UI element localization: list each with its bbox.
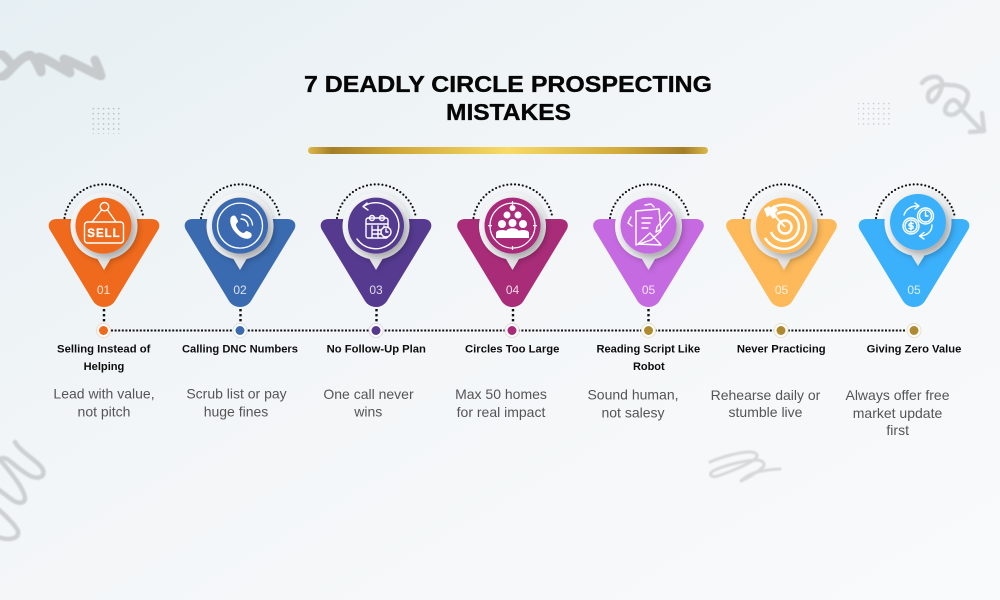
- icon: phone: [218, 203, 262, 248]
- description: [323, 386, 414, 420]
- icon disc: [212, 198, 268, 254]
- pointer shape: [321, 219, 431, 307]
- step number: 03: [369, 283, 383, 297]
- title: MISTAKES: [446, 99, 571, 125]
- description: One call never: [323, 386, 414, 402]
- card 6: Never Practicing: [711, 184, 837, 420]
- card 2: Calling DNC Numbers: [182, 184, 298, 420]
- connector stub: [512, 309, 514, 323]
- description: wins: [353, 404, 382, 420]
- dotted arc: [474, 184, 552, 218]
- description: Max 50 homes: [455, 386, 547, 402]
- description: [587, 386, 679, 420]
- heading: [57, 344, 151, 373]
- description: market update: [853, 405, 942, 421]
- card 1: Selling Instead of Helping: [49, 184, 159, 420]
- description: for real impact: [457, 404, 545, 420]
- dotted arc: [337, 184, 416, 218]
- dot grid: top right: [858, 101, 890, 127]
- heading: Selling Instead of: [57, 344, 151, 356]
- scribble: bottom left: [0, 442, 43, 539]
- dotted arc: [64, 184, 144, 218]
- icon disc: [484, 198, 540, 254]
- icon disc: [756, 198, 812, 254]
- step number: 05: [642, 283, 655, 297]
- description: not salesy: [601, 404, 665, 420]
- description: [186, 385, 287, 420]
- title: 7 DEADLY CIRCLE PROSPECTING: [304, 71, 712, 97]
- description: Sound human,: [587, 386, 679, 402]
- description: [53, 385, 155, 420]
- pin halo: [70, 193, 138, 270]
- pin halo: [206, 193, 274, 270]
- card 7: Giving Zero Value: [845, 184, 969, 438]
- icon: target and arrow: [764, 205, 806, 249]
- scribble: top right arrow: [922, 77, 984, 132]
- description: Always offer free: [845, 387, 950, 403]
- timeline node: [642, 324, 656, 338]
- heading: Calling DNC Numbers: [182, 344, 298, 356]
- icon: group of people in target: [488, 201, 537, 250]
- scribble: top left: [0, 53, 101, 78]
- pointer shape: [726, 219, 837, 307]
- description: Rehearse daily or: [711, 387, 821, 403]
- timeline node: [233, 324, 247, 338]
- description: Lead with value,: [53, 385, 155, 401]
- icon: money and time exchange: [903, 203, 934, 239]
- gold divider bar: [308, 147, 708, 154]
- description: stumble live: [729, 404, 803, 420]
- heading: No Follow-Up Plan: [327, 344, 426, 356]
- connector stub: [103, 309, 105, 323]
- title: [304, 71, 712, 125]
- icon: calendar and clock: [357, 203, 399, 249]
- heading: Robot: [633, 361, 665, 373]
- dotted arc: [201, 184, 280, 218]
- step number: 02: [233, 283, 247, 297]
- description: [711, 387, 821, 420]
- heading: Reading Script Like: [596, 344, 700, 356]
- timeline node: [774, 324, 788, 338]
- pin halo: [342, 193, 410, 270]
- pointer shape: [185, 219, 295, 307]
- timeline node: [369, 324, 383, 338]
- timeline node: [907, 324, 921, 338]
- icon: script and pen: [628, 204, 672, 245]
- heading: Giving Zero Value: [867, 344, 961, 356]
- scribble: bottom centre: [710, 452, 780, 481]
- card 3: No Follow-Up Plan: [321, 184, 431, 420]
- timeline connector: [111, 330, 906, 332]
- step number: 05: [775, 283, 788, 297]
- connector stub: [239, 309, 242, 323]
- description: first: [886, 422, 909, 438]
- dotted arc: [744, 184, 822, 218]
- card 5: Reading Script Like Robot: [587, 184, 704, 420]
- dot grid: top left: [89, 106, 121, 134]
- heading: Never Practicing: [737, 344, 826, 356]
- step number: 05: [907, 283, 921, 297]
- icon disc: [348, 198, 404, 254]
- description: huge fines: [204, 404, 268, 420]
- card 4: Circles Too Large: [455, 184, 568, 420]
- icon: sell sign: SELL: [87, 228, 121, 240]
- heading: Helping: [84, 361, 125, 373]
- icon disc: [890, 194, 946, 250]
- heading: Circles Too Large: [465, 344, 559, 356]
- pointer shape: [49, 219, 159, 307]
- description: [845, 387, 950, 438]
- pin halo: [615, 193, 682, 270]
- connector stub: [647, 309, 650, 323]
- pointer shape: [457, 219, 568, 307]
- dotted arc: [876, 184, 955, 218]
- description: [455, 386, 547, 420]
- dotted arc: [610, 184, 689, 218]
- timeline node: [96, 324, 110, 338]
- icon disc: [76, 198, 132, 254]
- pointer shape: [859, 219, 969, 307]
- pin halo: [751, 193, 818, 270]
- connector stub: [375, 309, 378, 323]
- icon disc: [620, 198, 676, 254]
- heading: [596, 344, 700, 373]
- step number: 04: [506, 283, 519, 297]
- icon: sell sign: [84, 202, 124, 243]
- description: not pitch: [78, 404, 130, 420]
- timeline node: [505, 324, 519, 338]
- pointer shape: [593, 219, 704, 307]
- pin halo: [885, 189, 952, 266]
- pin halo: [479, 193, 546, 270]
- description: Scrub list or pay: [186, 385, 287, 401]
- step number: 01: [97, 283, 110, 297]
